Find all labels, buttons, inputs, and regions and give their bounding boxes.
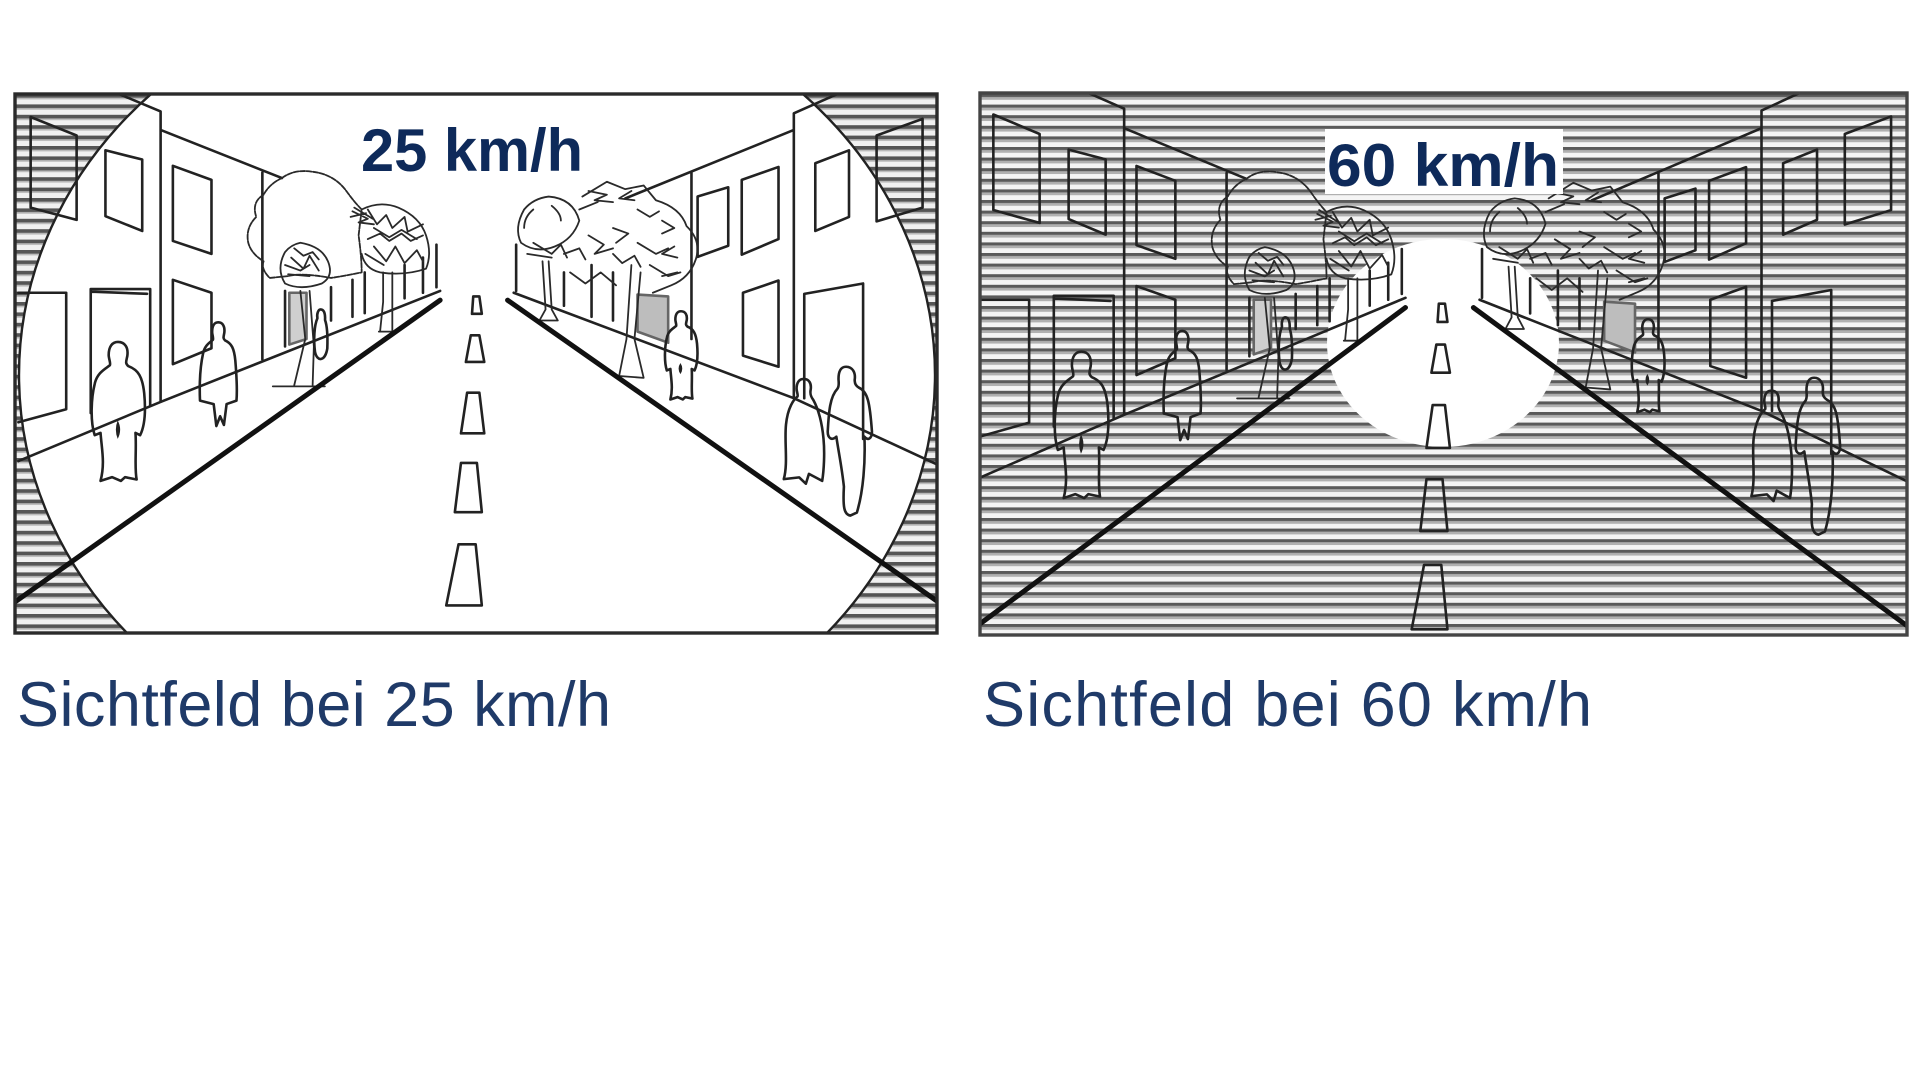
- label box: 60 km/h: 60 km/h: [1327, 132, 1559, 199]
- panel: field of view at 25 km/h: [13, 92, 939, 635]
- hatched area outside the field of view: [980, 93, 1907, 635]
- hatched area outside the field of view: [16, 96, 936, 632]
- caption: 25 km/h: Sichtfeld bei 25 km/h: [17, 670, 611, 740]
- caption: 60 km/h: Sichtfeld bei 60 km/h: [983, 670, 1592, 740]
- frame: [980, 93, 1907, 635]
- trees: [248, 171, 698, 386]
- road centre dashes: [446, 296, 484, 605]
- right buildings: [514, 93, 938, 465]
- road edges: [15, 300, 938, 602]
- panel: field of view at 60 km/h: [978, 89, 1907, 635]
- street scene illustration: [978, 89, 1906, 629]
- street scene illustration: [15, 93, 938, 605]
- pedestrians: [92, 309, 872, 516]
- frame: [15, 94, 937, 633]
- label: 25 km/h: 25 km/h: [361, 117, 583, 184]
- left buildings: [18, 93, 440, 461]
